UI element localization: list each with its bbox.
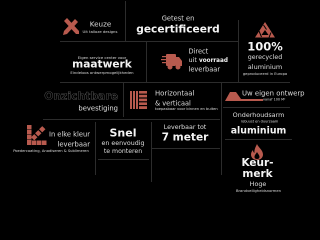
heading: maatwerk: maatwerk [72, 59, 132, 71]
caption: brandveiligheidsnormen: Brandveiligheidsnormen [236, 189, 281, 193]
text: direct uit voorraad leverbaar: leverbaar [188, 65, 220, 73]
icon: flame [251, 144, 263, 160]
heading: onzichtbare outline: Onzichtbare [44, 90, 118, 103]
caption: vanaf 100 m2: vanaf 100 M² [263, 97, 285, 101]
panel: onderhoudsarm aluminium [231, 111, 286, 136]
text: hoge: Hoge [250, 180, 266, 188]
text: onderhoudsarm: Onderhoudsarm [233, 111, 284, 119]
heading: snel: Snel [110, 126, 136, 139]
caption: toepasbaar: toepasbaar voor binnen en buiten [155, 107, 218, 111]
text: service center: Eigen service center voor [78, 55, 126, 60]
text: gerecycled: gerecycled [248, 54, 282, 61]
panel: maatwerk [70, 55, 134, 75]
panel: in elke kleur [13, 131, 90, 153]
icon: crossed pencil and ruler [63, 18, 79, 35]
stat: 100%: 100% [247, 39, 283, 53]
panel: snel monteren [102, 126, 144, 155]
icon: custom profile shape [225, 92, 263, 101]
text: direct uit voorraad leverbaar: Direct [188, 47, 208, 55]
text: getest en: Getest en [162, 15, 194, 23]
stat: 7 meter: 7 meter [162, 132, 208, 144]
text: horizontaal: Horizontaal [155, 90, 194, 98]
icon: colour palette squares [27, 125, 46, 145]
text: in elke kleur: In elke kleur [49, 131, 90, 139]
heading: gecertificeerd: gecertificeerd [136, 24, 220, 36]
icon: recycle [255, 22, 275, 38]
caption: robuust: robuust en duurzaam [241, 119, 278, 123]
panel: keuze [82, 19, 118, 34]
text: te monteren: te monteren [104, 148, 142, 155]
text: aluminium: aluminium [248, 63, 282, 71]
panel: horizontaal en verticaal [155, 90, 218, 111]
caption: mogelijkheden: Eindeloos ontwerpmogelijkheden [70, 70, 134, 75]
panel: 7 meter [162, 124, 208, 144]
heading: keurmerk: merk [242, 168, 273, 180]
panel: uw eigen ontwerp [242, 90, 305, 101]
text: leverbaar tot: Leverbaar tot [164, 124, 206, 131]
icon: horizontal and vertical slats [130, 91, 147, 109]
caption: europa: geproduceerd in Europa [243, 72, 287, 76]
panel: keurmerk [236, 157, 281, 193]
text: bevestiging: bevestiging [78, 105, 118, 113]
text: eenvoudig: en eenvoudig [102, 139, 144, 146]
caption: finishes: Poedercoating, Anodiseren & Sublimeren [13, 149, 89, 153]
text: direct uit voorraad leverbaar: uit voorraad [188, 56, 228, 64]
panel: gecertificeerd [136, 15, 220, 36]
text: leverbaar: leverbaar [57, 140, 90, 148]
icon: delivery truck [161, 54, 182, 70]
heading: keuze: Keuze [90, 19, 111, 28]
panel: 100% gerecycled aluminium [243, 39, 287, 76]
caption: designs: Uit talloze designs [83, 29, 117, 34]
heading: keurmerk: Keur- [241, 157, 274, 169]
text: verticaal: & verticaal [155, 99, 191, 107]
heading: keurmerk [241, 157, 274, 180]
heading: aluminium: aluminium [231, 125, 286, 136]
text: direct uit voorraad leverbaar [188, 47, 228, 73]
text: uw eigen ontwerp: Uw eigen ontwerp [242, 90, 305, 98]
panel: onzichtbare bevestiging [44, 90, 118, 113]
